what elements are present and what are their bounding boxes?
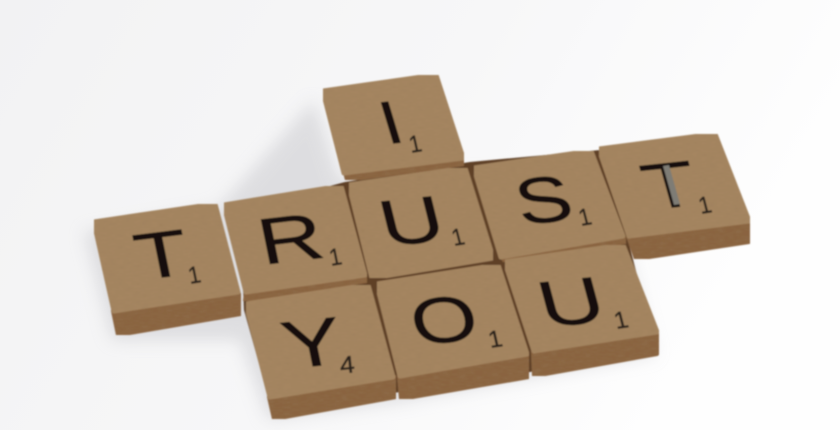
value: 1: 1 [186, 261, 203, 289]
tile: U (YOU) [505, 245, 659, 376]
value: 1: 1 [406, 130, 424, 158]
dark gaps between tiles [240, 150, 655, 410]
value: 4: 4 [339, 351, 356, 379]
tile: T (start of TRUST) [94, 204, 241, 335]
tile: U (TRUST) [349, 168, 493, 278]
letter: T: T [634, 148, 706, 224]
tile: Y [246, 285, 396, 419]
letter: S: S [507, 161, 580, 239]
letter: Y: Y [275, 302, 349, 383]
letter: T: T [128, 216, 195, 295]
letter: U: U [529, 263, 613, 341]
grey worn stem [663, 165, 680, 205]
tile: R [224, 186, 367, 301]
value: 1: 1 [327, 243, 344, 271]
letter: O: O [403, 281, 485, 360]
tile: T (end of TRUST) [599, 134, 750, 259]
letter: I: I [370, 88, 411, 157]
value: 1: 1 [576, 203, 594, 231]
value: 1: 1 [611, 307, 631, 335]
value: 1: 1 [696, 191, 714, 219]
letter: R: R [251, 199, 330, 279]
value: 1: 1 [486, 326, 505, 354]
letter: U: U [371, 183, 452, 260]
value: 1: 1 [449, 223, 467, 251]
tile shadows [84, 100, 655, 420]
tile: I [323, 75, 464, 180]
tile: S [474, 151, 626, 262]
tile: O [377, 265, 529, 399]
